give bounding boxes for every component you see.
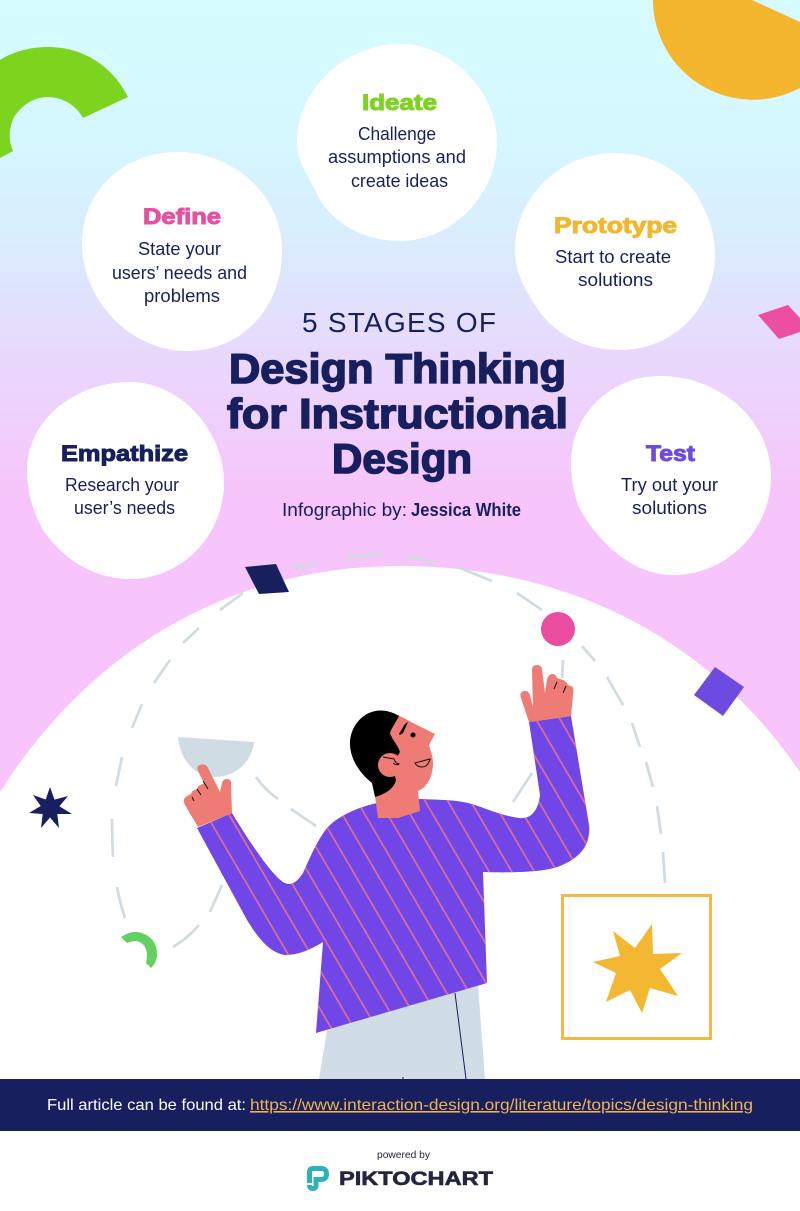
shape: navy parallelogram	[245, 564, 289, 594]
logo icon	[310, 1168, 326, 1188]
shape: navy star	[29, 787, 72, 828]
shape: pink diamond right edge	[758, 305, 800, 339]
right hand	[520, 665, 574, 722]
title block: for Instructional	[227, 390, 568, 437]
title block: Design	[332, 435, 472, 482]
shape: green small arc	[121, 932, 157, 968]
title block	[227, 307, 568, 482]
stage: Empathize: Empathize	[61, 441, 188, 466]
dashed juggling path	[112, 554, 665, 947]
stage: Test	[571, 376, 771, 575]
shape: pink circle	[541, 612, 575, 646]
byline	[282, 500, 521, 520]
stage: Test: Test	[646, 441, 696, 466]
powered by label: powered by	[377, 1149, 431, 1161]
stage: Ideate: create ideas	[351, 171, 448, 191]
stage: Empathize: Research your	[65, 475, 179, 495]
trousers	[319, 985, 485, 1079]
stage: Ideate: assumptions and	[328, 147, 466, 167]
bowl	[178, 737, 254, 777]
stage: Ideate: Ideate	[362, 90, 437, 115]
footer bar with article link	[0, 1079, 800, 1131]
stage: Define: users’ needs and	[112, 263, 247, 283]
framed yellow star	[562, 896, 710, 1038]
stage: Define: State your	[138, 239, 221, 259]
footer bar with article link: https://www.interaction-design.org/literature/topics/design-thinking	[250, 1097, 753, 1114]
byline: Infographic by:	[282, 500, 407, 520]
stage: Empathize: user’s needs	[74, 498, 175, 518]
striped sweater	[197, 716, 590, 1033]
stage: Define	[82, 152, 282, 351]
left hand	[184, 764, 232, 827]
title block: 5 STAGES OF	[302, 307, 496, 338]
byline: Jessica White	[411, 500, 521, 520]
head and neck	[350, 711, 435, 818]
stage: Test: Try out your	[621, 475, 718, 495]
stage: Ideate: Challenge	[358, 124, 436, 144]
stage: Prototype: solutions	[578, 270, 653, 290]
stage: Prototype	[515, 153, 715, 350]
title block: Design Thinking	[229, 345, 566, 392]
stage: Prototype: Start to create	[555, 247, 671, 267]
gradient background	[0, 0, 800, 800]
stage: Prototype: Prototype	[554, 213, 677, 238]
stage: Define: Define	[143, 204, 221, 229]
logo wordmark: PIKTOCHART	[339, 1169, 493, 1190]
shape: yellow semicircle top right	[653, 0, 800, 100]
stage: Test: solutions	[632, 498, 707, 518]
footer bar with article link: Full article can be found at:	[47, 1097, 246, 1114]
illustration: person juggling	[184, 665, 590, 1079]
shape: purple square	[694, 667, 744, 716]
stage: Define: problems	[144, 286, 220, 306]
stage: Ideate	[297, 44, 497, 241]
stage: Empathize	[27, 382, 224, 579]
white hill	[0, 566, 800, 1079]
shape: green arc top left	[0, 47, 128, 158]
